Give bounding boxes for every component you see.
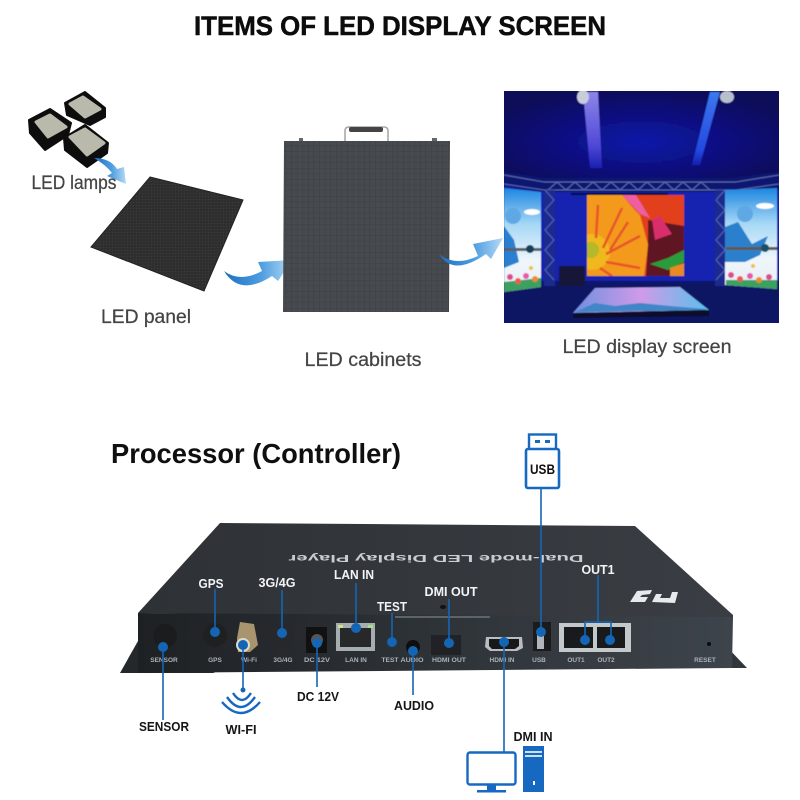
silk-screen port names: LAN IN (345, 657, 367, 664)
icon: LED lamps (29, 92, 108, 167)
port: lan in (336, 623, 375, 651)
callout: hdmi in with computer: DMI IN (514, 730, 552, 744)
label: LED lamps: LED lamps (32, 173, 116, 194)
right flange (726, 646, 747, 668)
port: audio (406, 640, 420, 654)
truss (504, 172, 779, 192)
silk-screen port names: USB (532, 657, 546, 664)
callout: 3g/4g (258, 575, 296, 638)
printed product name: Dual-mode LED Display Player (288, 552, 584, 564)
left flange (120, 641, 215, 673)
silk-screen port names: 3G/4G (273, 657, 293, 664)
callout: test (377, 599, 407, 647)
callout: wi-fi: WI-FI (226, 723, 256, 737)
arrow: cabinet to screen (439, 238, 503, 266)
podium (559, 266, 585, 286)
silk-screen port names: OUT2 (597, 657, 615, 664)
LED cabinet (283, 127, 450, 312)
icon: usb stick: USB (530, 462, 555, 477)
indicator (440, 605, 446, 609)
silk-screen port names: HDMI IN (490, 657, 515, 664)
callout: hdmi in with computer (468, 637, 552, 792)
callout: hdmi out (424, 584, 478, 648)
label: LED display screen: LED display screen (562, 337, 732, 358)
label: LED panel: LED panel (101, 307, 191, 328)
arrow: lamps to panel (94, 158, 126, 184)
port: 3g/4g (270, 623, 294, 647)
port: hdmi in (485, 637, 523, 651)
port: hdmi out (431, 635, 461, 655)
callout: dc 12v (297, 638, 340, 704)
silk-screen port names: TEST (382, 657, 399, 664)
label: LED cabinets: LED cabinets (304, 350, 422, 371)
callout: audio (394, 646, 434, 713)
icon: usb stick (526, 434, 559, 488)
left screen flowers (504, 266, 541, 292)
callout: audio: AUDIO (394, 699, 434, 713)
callout: 3g/4g: 3G/4G (258, 575, 296, 590)
callout: sensor (139, 642, 189, 734)
callout: lan in (334, 567, 374, 633)
floor screen (573, 287, 709, 313)
photo: LED display screen (500, 88, 783, 328)
arrow: panel to cabinet (224, 260, 292, 285)
silk-screen port names: RESET (694, 657, 716, 664)
top face (138, 523, 733, 620)
LED panel (91, 177, 243, 291)
silk-screen port names: SENSOR (150, 657, 178, 664)
silk-screen port names: GPS (208, 657, 223, 664)
port: out1 and out2 (559, 623, 631, 652)
port: sensor (153, 624, 177, 648)
callout: test: TEST (377, 599, 407, 614)
title: ITEMS OF LED DISPLAY SCREEN (194, 11, 606, 41)
icon: monitor (468, 752, 516, 792)
callout: sensor: SENSOR (139, 720, 189, 734)
callout: out1: OUT1 (582, 562, 614, 577)
callout: dc 12v: DC 12V (297, 690, 340, 704)
back wall (504, 185, 779, 281)
silk-screen port names: HDMI OUT (432, 657, 466, 664)
port: wi-fi antenna (236, 622, 258, 652)
front edge highlight (395, 616, 490, 618)
silk-screen port names: AUDIO (400, 657, 424, 664)
port: gps (203, 623, 227, 647)
central flower screen (571, 193, 668, 195)
port: usb (533, 622, 551, 651)
silk-screen port names (150, 657, 716, 664)
silk-screen port names: OUT1 (567, 657, 585, 664)
port: test (387, 637, 397, 647)
floor (600, 312, 708, 318)
port: dc 12v (306, 627, 327, 653)
silk-screen port names: DC 12V (304, 657, 331, 664)
callout: out1 (580, 562, 615, 645)
heading: Processor (Controller): Processor (Controller) (111, 438, 401, 469)
icon: computer tower (523, 746, 544, 792)
callout: gps (198, 576, 224, 637)
processor device (120, 523, 747, 673)
callout: lan in: LAN IN (334, 567, 374, 582)
right screen (725, 188, 777, 289)
brand mark (630, 590, 652, 602)
left screen (504, 188, 541, 292)
right screen flowers (726, 264, 777, 289)
reset pinhole (707, 642, 711, 646)
spotlight beams (583, 92, 602, 168)
callout: gps: GPS (198, 576, 224, 591)
callout: usb (526, 434, 559, 637)
callout: hdmi out: DMI OUT (424, 584, 478, 599)
callout: wi-fi (222, 640, 260, 737)
silk-screen port names: Wi-Fi (241, 657, 257, 664)
front face (138, 613, 733, 673)
